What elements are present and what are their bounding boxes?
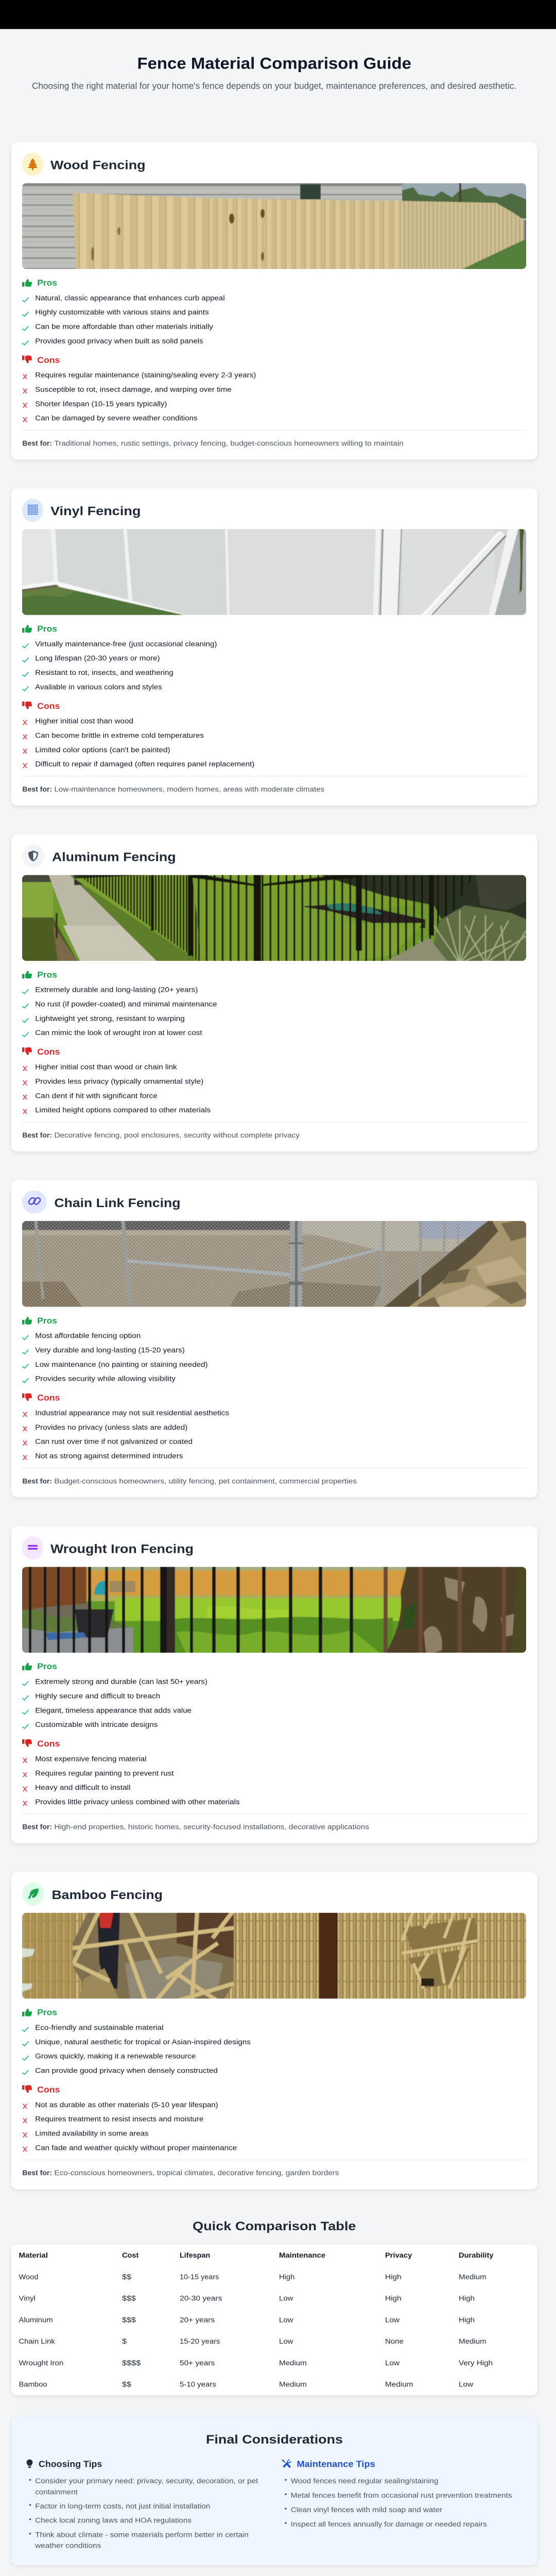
best for: Budget-conscious homeowners, utility fencing, pet containment, commercial properties <box>54 1477 357 1485</box>
row: vinyl: $$$ <box>122 2294 136 2302</box>
best for: High-end properties, historic homes, security-focused installations, decorative applications <box>54 1823 369 1831</box>
panel: chain link fencing <box>11 1180 537 1497</box>
pros list: Virtually maintenance-free (just occasional cleaning) <box>35 639 217 648</box>
subtitle: Choosing the right material for your home's fence depends on your budget, maintenance preferences, and desired aesthetic. <box>32 81 516 91</box>
pros list: Highly secure and difficult to breach <box>35 1692 160 1700</box>
pros list: Provides good privacy when built as solid panels <box>35 336 203 345</box>
row: vinyl: High <box>459 2294 475 2302</box>
heading: Vinyl Fencing <box>50 504 141 518</box>
cons list: Most expensive fencing material <box>35 1755 146 1762</box>
pros list: Provides security while allowing visibility <box>35 1375 176 1383</box>
pros list: Very durable and long-lasting (15-20 years) <box>35 1346 185 1354</box>
maintenance tips list: Clean vinyl fences with mild soap and water <box>291 2505 442 2514</box>
pros list: Can mimic the look of wrought iron at lower cost <box>35 1028 202 1037</box>
cons list: Can be damaged by severe weather conditions <box>35 414 198 422</box>
image: vinyl fence <box>20 527 529 617</box>
panel: vinyl fencing <box>11 488 537 805</box>
maintenance tips heading: Maintenance Tips <box>297 2459 375 2469</box>
pros list: Highly customizable with various stains and paints <box>35 308 209 316</box>
row: wrought iron: Wrought Iron <box>19 2359 63 2367</box>
cons list: Not as durable as other materials (5-10 year lifespan) <box>35 2100 218 2109</box>
pros list: Grows quickly, making it a renewable resource <box>35 2052 196 2060</box>
pros heading <box>22 2008 57 2018</box>
cons heading <box>22 355 60 365</box>
pros list: Low maintenance (no painting or staining needed) <box>35 1360 208 1368</box>
pros list: Extremely strong and durable (can last 50+ years) <box>35 1677 207 1686</box>
cons list <box>23 1755 240 1806</box>
table header row: Durability <box>459 2251 494 2259</box>
cons list: Provides less privacy (typically ornamental style) <box>35 1077 203 1085</box>
cons list: Can fade and weather quickly without proper maintenance <box>35 2144 237 2151</box>
cons heading <box>22 2085 60 2094</box>
choosing tips list: Consider your primary need: privacy, security, decoration, or pet <box>35 2477 258 2485</box>
cons list: Requires regular painting to prevent rust <box>35 1769 174 1777</box>
row: bamboo: Bamboo <box>19 2380 47 2388</box>
row: wood <box>19 2273 486 2281</box>
maintenance tips list <box>286 2477 512 2528</box>
pros list: Extremely durable and long-lasting (20+ years) <box>35 986 198 994</box>
maintenance tips list: Inspect all fences annually for damage or needed repairs <box>291 2520 487 2528</box>
cons list: Requires regular maintenance (staining/sealing every 2-3 years) <box>35 371 256 379</box>
cons heading <box>22 1739 60 1749</box>
row: chain link: $ <box>122 2337 127 2345</box>
pros list <box>23 1677 207 1728</box>
cons heading: Cons <box>37 1393 60 1403</box>
maintenance tips list: Wood fences need regular sealing/staining <box>291 2477 438 2485</box>
pros heading <box>22 1316 57 1326</box>
row: wrought iron: Low <box>385 2359 400 2367</box>
best for: Best for: <box>22 1131 52 1139</box>
heading: Chain Link Fencing <box>54 1196 181 1210</box>
row: chain link: Low <box>279 2337 294 2345</box>
image: bamboo fence <box>20 1910 529 2001</box>
final heading: Final Considerations <box>206 2433 343 2447</box>
row: bamboo: $$ <box>122 2380 131 2388</box>
cons heading <box>22 701 60 711</box>
pros list <box>23 639 217 691</box>
pros heading <box>22 1662 57 1671</box>
pros heading: Pros <box>37 1316 57 1326</box>
panel: wood fencing <box>11 142 537 460</box>
row: bamboo: Medium <box>279 2380 307 2388</box>
row: aluminum: 20+ years <box>180 2316 215 2324</box>
best for: Best for: <box>22 439 52 447</box>
best for: Decorative fencing, pool enclosures, security without complete privacy <box>54 1131 300 1139</box>
panel: aluminum fencing <box>11 834 537 1151</box>
title: Fence Material Comparison Guide <box>137 54 411 73</box>
row: bamboo: 5-10 years <box>180 2380 216 2388</box>
cons list: Limited color options (can't be painted) <box>35 745 170 754</box>
pros heading: Pros <box>37 624 57 634</box>
comparison table <box>11 2244 537 2395</box>
icon: shield <box>22 844 44 868</box>
choosing tips heading: Choosing Tips <box>39 2459 102 2469</box>
pros list <box>23 1331 208 1383</box>
row: aluminum: High <box>459 2316 475 2324</box>
icon: leaf <box>22 1883 44 1906</box>
cons list: Can dent if hit with significant force <box>35 1091 158 1099</box>
row: wood: 10-15 years <box>180 2273 219 2281</box>
cons list: Difficult to repair if damaged (often requires panel replacement) <box>35 760 255 768</box>
pros list <box>23 294 225 345</box>
icon: chain link <box>22 1191 47 1214</box>
pros list: No rust (if powder-coated) and minimal maintenance <box>35 1000 217 1008</box>
row: aluminum: Aluminum <box>19 2316 53 2324</box>
row: wood: $$ <box>122 2273 131 2281</box>
row: wrought iron: 50+ years <box>180 2359 215 2367</box>
pros list: Natural, classic appearance that enhances curb appeal <box>35 294 225 302</box>
cons list: Limited height options compared to other materials <box>35 1106 211 1114</box>
cons list: Requires treatment to resist insects and moisture <box>35 2115 204 2123</box>
pros list: Most affordable fencing option <box>35 1331 141 1340</box>
row: bamboo: Low <box>459 2380 474 2388</box>
table header row: Material <box>19 2251 48 2259</box>
best for: Low-maintenance homeowners, modern homes, areas with moderate climates <box>54 785 324 793</box>
row: vinyl: Low <box>279 2294 294 2302</box>
cons list <box>23 371 256 422</box>
cons list: Higher initial cost than wood or chain link <box>35 1063 177 1071</box>
row: chain link: 15-20 years <box>180 2337 220 2345</box>
row: wood: Medium <box>459 2273 486 2281</box>
cons list <box>23 1063 211 1114</box>
table header row: Privacy <box>385 2251 412 2259</box>
row: wood: Wood <box>19 2273 38 2281</box>
best for: Eco-conscious homeowners, tropical climates, decorative fencing, garden borders <box>54 2168 339 2177</box>
pros list: Unique, natural aesthetic for tropical or Asian-inspired designs <box>35 2038 251 2046</box>
cons list: Higher initial cost than wood <box>35 717 133 725</box>
best for: Traditional homes, rustic settings, privacy fencing, budget-conscious homeowners willing to maintain <box>54 439 404 447</box>
pros list: Available in various colors and styles <box>35 683 162 691</box>
row: vinyl: Vinyl <box>19 2294 36 2302</box>
cons list <box>23 1409 229 1460</box>
best for: Best for: <box>22 1823 52 1831</box>
choosing tips list: weather conditions <box>34 2541 101 2550</box>
table header row <box>19 2251 494 2259</box>
cons heading: Cons <box>37 355 60 365</box>
row: wood: High <box>279 2273 294 2281</box>
image: wrought iron fence <box>20 1564 529 1655</box>
pros list: Long lifespan (20-30 years or more) <box>35 654 160 662</box>
icon: grid <box>22 499 43 522</box>
maintenance tips list: Metal fences benefit from occasional rust prevention treatments <box>291 2491 512 2499</box>
pros list: Lightweight yet strong, resistant to warping <box>35 1014 185 1022</box>
choosing tips list: containment <box>35 2487 78 2496</box>
choosing tips list: Think about climate - some materials perform better in certain <box>35 2531 249 2539</box>
pros heading: Pros <box>37 970 57 979</box>
cons list <box>23 717 255 768</box>
panel: wrought iron fencing <box>11 1526 537 1843</box>
cons list: Can become brittle in extreme cold temperatures <box>35 731 204 739</box>
choosing tips list: Factor in long-term costs, not just initial installation <box>35 2502 210 2510</box>
cons list: Provides little privacy unless combined with other materials <box>35 1798 240 1806</box>
cons list: Heavy and difficult to install <box>35 1783 131 1791</box>
pros heading: Pros <box>37 1662 57 1671</box>
cons heading: Cons <box>37 701 60 711</box>
heading: Wrought Iron Fencing <box>50 1543 194 1556</box>
icon: tree <box>22 152 43 176</box>
row: bamboo <box>19 2380 474 2388</box>
row: aluminum: Low <box>279 2316 294 2324</box>
pros heading <box>22 970 57 979</box>
pros list: Can provide good privacy when densely constructed <box>35 2066 218 2074</box>
pros heading <box>22 624 57 634</box>
row: vinyl: High <box>385 2294 402 2302</box>
row: aluminum <box>19 2316 475 2324</box>
pros list: Customizable with intricate designs <box>35 1720 158 1728</box>
row: chain link: Medium <box>459 2337 486 2345</box>
heading: Aluminum Fencing <box>52 851 176 864</box>
cons list: Shorter lifespan (10-15 years typically) <box>35 400 167 408</box>
row: wrought iron: $$$$ <box>122 2359 141 2367</box>
pros heading: Pros <box>37 278 57 287</box>
row: wrought iron: Medium <box>279 2359 307 2367</box>
table header row: Maintenance <box>279 2251 326 2259</box>
cons heading <box>22 1393 60 1403</box>
choosing tips list: Check local zoning laws and HOA regulations <box>35 2516 192 2524</box>
row: wood: High <box>385 2273 402 2281</box>
image: chain link fence <box>20 1218 529 1309</box>
cons list: Not as strong against determined intruders <box>35 1452 183 1460</box>
cons list: Industrial appearance may not suit residential aesthetics <box>35 1409 229 1417</box>
cons list <box>23 2100 237 2151</box>
heading: Wood Fencing <box>50 159 146 173</box>
pros list: Elegant, timeless appearance that adds value <box>35 1706 192 1714</box>
row: chain link <box>19 2337 486 2345</box>
best for: Best for: <box>22 2168 52 2177</box>
row: chain link: Chain Link <box>19 2337 55 2345</box>
pros list <box>23 986 217 1037</box>
pros list <box>23 2023 251 2074</box>
top black bar <box>0 0 556 29</box>
choosing tips list <box>30 2477 258 2550</box>
icon: grip lines <box>22 1536 43 1560</box>
best for: Best for: <box>22 785 52 793</box>
row: bamboo: Medium <box>385 2380 413 2388</box>
image: aluminum fence <box>20 873 529 963</box>
row: wrought iron <box>19 2359 493 2367</box>
pros list: Resistant to rot, insects, and weathering <box>35 668 173 676</box>
row: vinyl <box>19 2294 475 2302</box>
cons list: Provides no privacy (unless slats are added) <box>35 1423 187 1431</box>
table header row: Cost <box>122 2251 139 2259</box>
row: chain link: None <box>385 2337 404 2345</box>
row: aluminum: $$$ <box>122 2316 136 2324</box>
row: wrought iron: Very High <box>459 2359 493 2367</box>
table header row: Lifespan <box>180 2251 210 2259</box>
pros heading <box>22 278 57 287</box>
cons list: Susceptible to rot, insect damage, and warping over time <box>35 385 232 394</box>
image: wood fence <box>20 181 529 272</box>
cons heading: Cons <box>37 1047 60 1057</box>
pros list: Eco-friendly and sustainable material <box>35 2023 164 2031</box>
table heading: Quick Comparison Table <box>193 2219 356 2233</box>
cons list: Can rust over time if not galvanized or coated <box>35 1437 193 1446</box>
pros heading: Pros <box>37 2008 57 2018</box>
panel: bamboo fencing <box>11 1872 537 2189</box>
best for: Best for: <box>22 1477 52 1485</box>
cons list: Limited availability in some areas <box>35 2129 149 2138</box>
row: vinyl: 20-30 years <box>180 2294 222 2302</box>
cons heading: Cons <box>37 2085 60 2094</box>
cons heading <box>22 1047 60 1057</box>
row: aluminum: Low <box>385 2316 400 2324</box>
pros list: Can be more affordable than other materials initially <box>35 323 213 330</box>
heading: Bamboo Fencing <box>52 1888 163 1902</box>
panel: final considerations <box>11 2417 537 2565</box>
cons heading: Cons <box>37 1739 60 1749</box>
